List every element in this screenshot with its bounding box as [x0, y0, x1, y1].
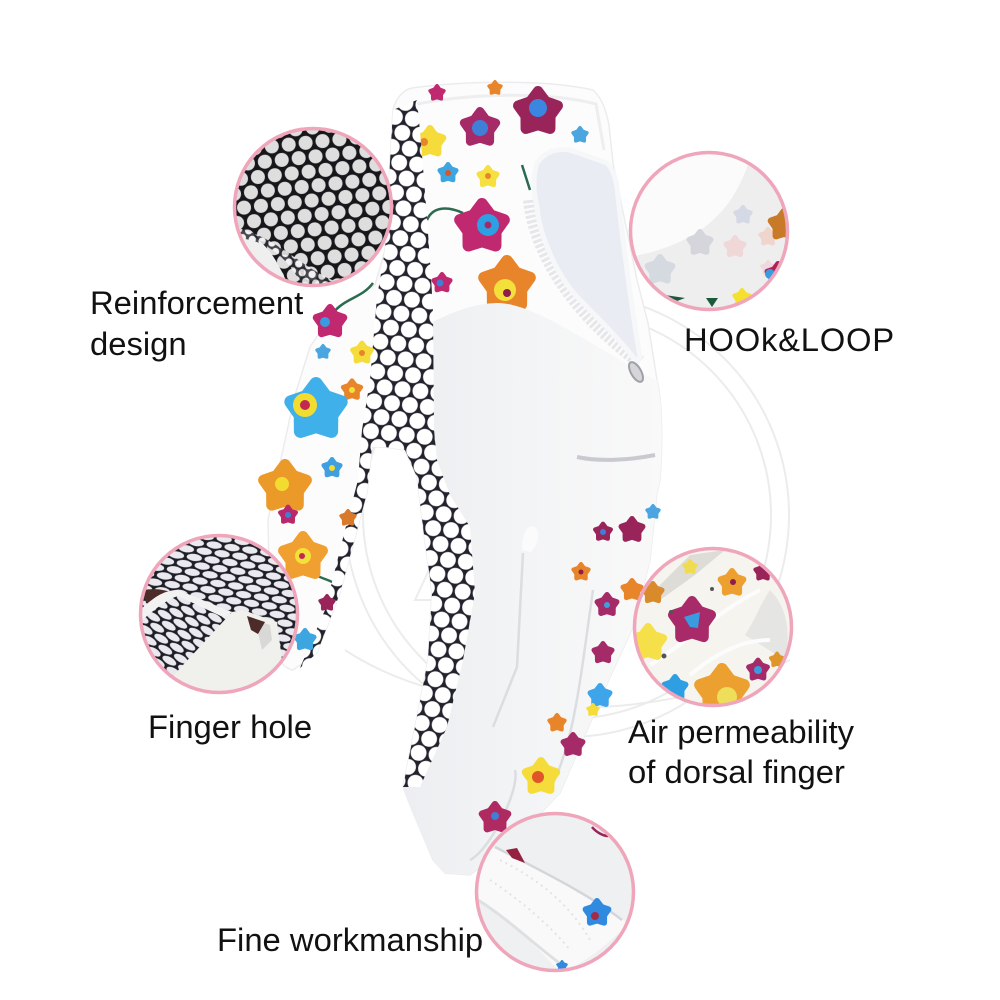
label: Reinforcement [90, 284, 303, 321]
callout: finger hole [135, 536, 312, 745]
print: cuff and upper palm flowers [417, 82, 587, 304]
finger bump [522, 526, 538, 552]
glove [264, 82, 662, 875]
label: HOOk&LOOP [684, 321, 895, 358]
label: Finger hole [148, 708, 312, 745]
label: design [90, 325, 187, 362]
callout: fine workmanship [217, 814, 634, 972]
strap slot [626, 360, 646, 384]
seams [577, 455, 655, 460]
detail circle: finger hole [135, 536, 298, 700]
label: Air permeability [628, 713, 854, 750]
callout: hook and loop [625, 145, 895, 358]
label: of dorsal finger [628, 753, 845, 790]
palm leather [403, 303, 662, 875]
print: stems [310, 165, 530, 585]
detail circle: dorsal finger [633, 548, 792, 711]
grip band [300, 100, 475, 787]
callout: reinforcement design [90, 128, 392, 362]
mesh beside strap [530, 200, 640, 362]
watermark [345, 293, 790, 737]
detail circle: dotted grip [225, 128, 392, 295]
hook and loop strap [534, 150, 640, 362]
label: Fine workmanship [217, 921, 483, 958]
cuff piping [408, 95, 604, 150]
callout: air permeability [628, 548, 855, 790]
detail circle: strap [625, 145, 797, 310]
print: thumb flowers [264, 308, 371, 648]
detail circle: stitching [475, 814, 634, 972]
print: finger flowers [482, 506, 659, 829]
glove body [268, 82, 662, 875]
